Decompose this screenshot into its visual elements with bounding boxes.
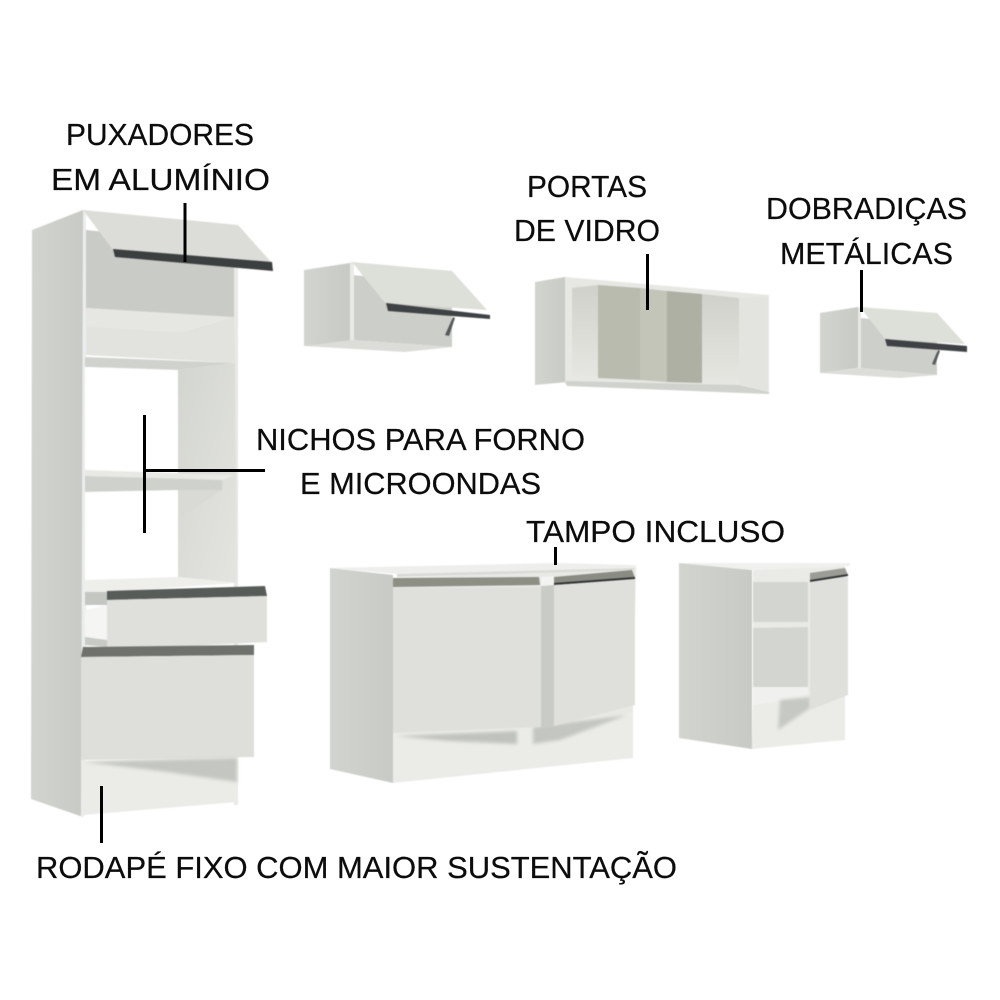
callout: dobradiças metálicas [766,191,967,312]
fixed plinth [81,757,237,815]
two door base cabinet [330,563,636,783]
callout: dobradiças metálicas: METÁLICAS [780,236,953,271]
callout: nichos para forno e microondas: NICHOS PARA FORNO [256,422,585,457]
callout: nichos para forno e microondas: E MICROONDAS [300,466,541,501]
callout: dobradiças metálicas: DOBRADIÇAS [766,191,967,226]
callout: portas de vidro: DE VIDRO [514,213,660,248]
callout: puxadores [51,117,270,262]
wall cabinet right with lift-up door [820,307,967,378]
callout: rodapé fixo [36,786,677,885]
glass door wall cabinet [535,277,769,394]
lower door [81,645,254,760]
single door base cabinet [679,563,850,749]
callout: tampo incluso [526,514,785,565]
top lift-up flap door [83,210,273,271]
open drawer [85,586,267,650]
callout: puxadores: EM ALUMÍNIO [51,162,270,197]
callout: tampo incluso: TAMPO INCLUSO [526,514,785,549]
callout: portas de vidro [514,169,660,310]
callout: nichos para forno e microondas [143,415,585,533]
callout: rodapé fixo: RODAPÉ FIXO COM MAIOR SUSTENTAÇÃO [36,850,677,885]
callout: puxadores: PUXADORES [66,117,254,152]
tall oven tower cabinet [31,210,273,817]
callout: portas de vidro: PORTAS [527,169,647,204]
wall cabinet left with lift-up door [304,262,490,352]
